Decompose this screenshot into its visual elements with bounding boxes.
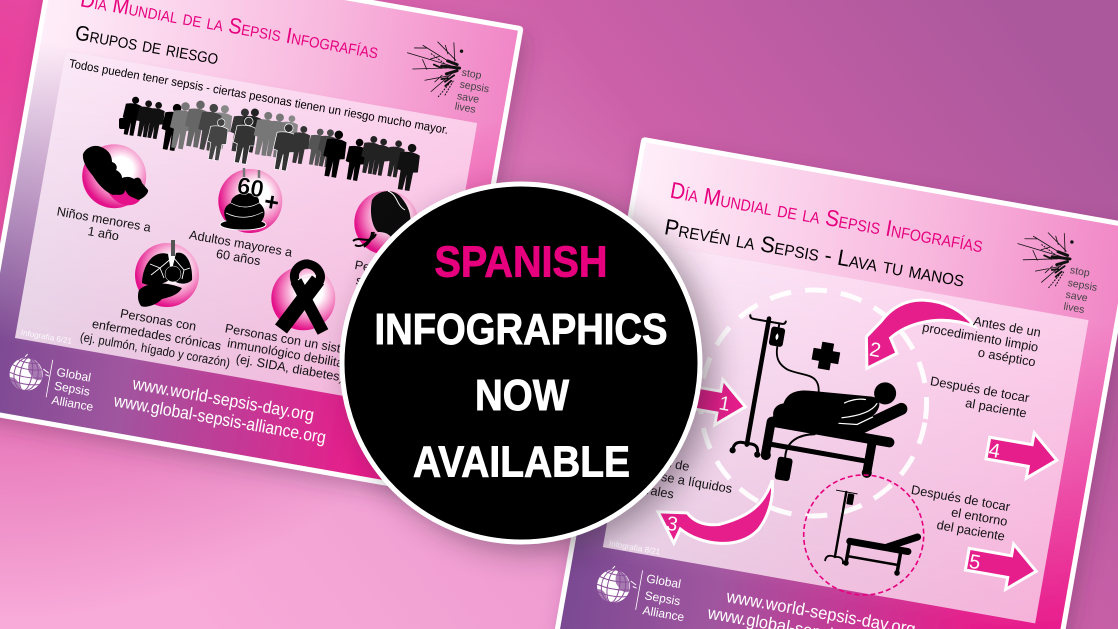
- arrow 5: [963, 537, 1040, 594]
- label: moment 3: corporales: [614, 476, 675, 502]
- label: chronic disease: Personas con: [119, 307, 197, 334]
- arrow 2: [861, 291, 978, 386]
- label: partially covered: Pe: [354, 258, 371, 274]
- title: Día Mundial de la Sepsis Infografías: [668, 177, 985, 257]
- arrow 3: [653, 462, 775, 558]
- label: weak immune system: (ej. SIDA, diabetes): [235, 352, 345, 385]
- stop sepsis logo: lives: [454, 100, 477, 116]
- stop sepsis logo: sepsis: [459, 78, 490, 95]
- label: older adults: Adultos mayores a: [188, 228, 293, 260]
- label: moment 5: el entorno: [950, 504, 1009, 529]
- stop sepsis logo: save: [456, 90, 480, 106]
- logo: Global Sepsis Alliance: Global: [645, 571, 682, 591]
- logo: Global Sepsis Alliance: [593, 563, 691, 624]
- icon: empty bed in patient zone: [794, 465, 933, 605]
- arrow 5: 5: [967, 551, 982, 574]
- label: infants: Niños menores a: [56, 204, 152, 235]
- label: chronic disease: enfermedades crónicas: [91, 317, 222, 353]
- label: older adults: 60 años: [215, 247, 262, 268]
- arrow 1: 1: [717, 392, 732, 416]
- label: moment 4: al paciente: [964, 395, 1028, 421]
- dashed patient zone circle: [794, 465, 933, 605]
- label: moment 2: procedimiento limpio: [921, 319, 1039, 355]
- logo: Global Sepsis Alliance: Alliance: [642, 603, 686, 624]
- label: moment 2: o aséptico: [977, 344, 1037, 369]
- label: moment 5: del paciente: [936, 517, 1006, 544]
- card frame: [0, 0, 524, 495]
- stop sepsis logo: [1007, 226, 1105, 318]
- black announcement badge: [342, 184, 700, 542]
- website links: www.world-sepsis-day.org: [130, 373, 316, 425]
- label: moment 3: Después de: [621, 447, 691, 474]
- arrow 2: 2: [868, 339, 883, 362]
- label: weak immune system: inmunológico debilitado: [226, 336, 358, 373]
- badge text: INFOGRAPHICS: INFOGRAPHICS: [374, 305, 668, 354]
- label: partially covered: s: [355, 273, 364, 288]
- icon: cake 60+: +: [262, 187, 281, 217]
- stop sepsis logo: stop: [461, 67, 483, 82]
- page number: Infografía 8/21: [608, 539, 661, 557]
- label: moment 2: Antes de un: [972, 313, 1042, 340]
- card frame: [554, 137, 1118, 629]
- icon: patient in bed with IV: [723, 315, 913, 499]
- icon: awareness ribbon: [271, 264, 335, 332]
- icon: cake 60+: 60: [235, 172, 266, 204]
- label: moment 4: Después de tocar: [929, 373, 1031, 405]
- stop sepsis logo: [399, 35, 496, 118]
- label: moment 5: Después de tocar: [910, 482, 1012, 514]
- logo: Global Sepsis Alliance: [5, 352, 101, 414]
- icon: baby: [82, 144, 148, 208]
- panel: infographic card Lava tu manos: [554, 137, 1118, 629]
- website links: www.global-sepsis-alliance.org: [112, 390, 328, 447]
- dashed care circle: [683, 272, 944, 534]
- badge text: SPANISH: SPANISH: [434, 238, 608, 287]
- stop sepsis logo: stop: [1069, 264, 1091, 279]
- label: chronic disease: (ej. pulmón, hígado y corazón): [79, 330, 231, 370]
- icon: cake 60+: [218, 168, 282, 233]
- logo: Global Sepsis Alliance: Alliance: [51, 393, 95, 414]
- content panel: [15, 50, 477, 411]
- icon: lungs and liver: [135, 240, 199, 307]
- panel: infographic card Grupos de riesgo: [0, 0, 524, 495]
- content panel: [603, 244, 1089, 623]
- logo: Global Sepsis Alliance: Sepsis: [53, 379, 91, 399]
- arrow 4: [984, 425, 1061, 483]
- stop sepsis logo: lives: [1063, 301, 1085, 316]
- website links: [112, 370, 331, 447]
- stop sepsis logo: sepsis: [1067, 277, 1098, 294]
- label: moment 3: exponerse a líquidos: [614, 461, 733, 496]
- heading: Prevén la Sepsis - Lava tu manos: [663, 214, 966, 292]
- page number: Infografía 6/21: [20, 328, 73, 346]
- circle shadow: [352, 190, 714, 552]
- heading: Grupos de riesgo: [73, 22, 220, 69]
- crowd silhouettes: [119, 95, 423, 192]
- label: infants: 1 año: [87, 224, 120, 243]
- logo: Global Sepsis Alliance: Global: [55, 365, 92, 385]
- badge text: AVAILABLE: AVAILABLE: [413, 438, 630, 487]
- stop sepsis logo: save: [1065, 289, 1089, 305]
- arrow 3: 3: [665, 513, 679, 536]
- logo: Global Sepsis Alliance: Sepsis: [644, 588, 682, 608]
- arrow 4: 4: [987, 439, 1002, 463]
- icons and crowd drawn in page space: [82, 95, 423, 332]
- arrow 1: [672, 372, 749, 429]
- icon: head profile: [353, 191, 418, 255]
- icon: plus: [811, 341, 841, 371]
- label: weak immune system: Personas con un sistema: [224, 321, 366, 360]
- badge text: NOW: NOW: [475, 371, 569, 420]
- intro sentence: Todos pueden tener sepsis - ciertas pesonas tienen un riesgo mucho mayor.: [68, 56, 450, 137]
